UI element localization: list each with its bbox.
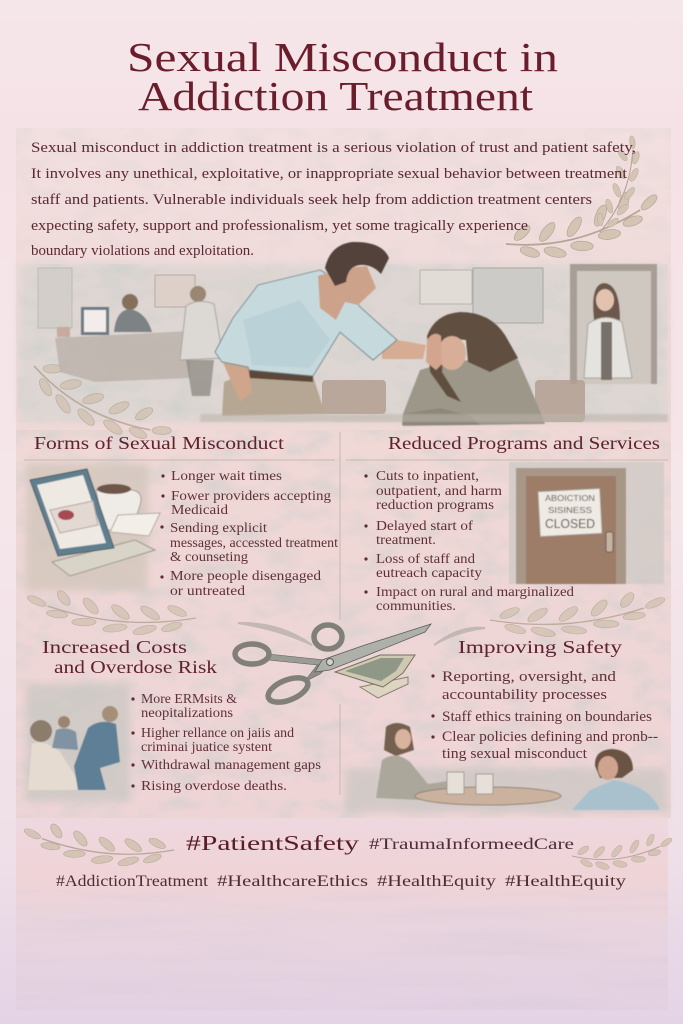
lower handle [304, 660, 335, 682]
bullet list: Cuts to inpatient, [376, 469, 479, 484]
footer wash [16, 818, 668, 1010]
heading: and Overdose Risk [54, 657, 217, 677]
bullet list: communities. [376, 599, 456, 614]
clinic wall background [18, 264, 668, 422]
illustration: tablet and coffee [26, 463, 160, 591]
panel: increased costs and overdose risk [26, 637, 321, 802]
panel: reduced programs and services [364, 433, 664, 614]
hashtags row two: #HealthEquity [505, 873, 626, 890]
panel: forms of sexual misconduct [26, 433, 338, 599]
bullet list: or untreated [170, 584, 245, 599]
bullet list: neopitalizations [141, 706, 233, 721]
swoosh behind scissors [238, 623, 485, 645]
bullet list: More ERMsits & [141, 692, 237, 707]
bullet list: & counseting [170, 550, 248, 565]
hashtags row two: #HealthcareEthics [217, 873, 368, 890]
bullet list [364, 469, 574, 614]
illustration: two people at a table [345, 723, 667, 812]
heading: Forms of Sexual Misconduct [34, 433, 284, 453]
title: Addiction Treatment [138, 73, 534, 119]
heading [42, 637, 217, 677]
illustration: ER scene [26, 684, 130, 802]
table edge [200, 414, 668, 422]
bullet list: messages, accessted treatment [170, 536, 338, 551]
closed sign: CLOSED [545, 517, 595, 531]
bullet list: eutreach capacity [376, 566, 482, 581]
hero illustration: clinic scene [18, 242, 668, 471]
bullet list: accountability processes [442, 687, 607, 703]
bullet list [131, 692, 321, 794]
title [127, 34, 558, 119]
title: Sexual Misconduct in [127, 34, 558, 80]
closed sign: SISINESS [548, 505, 592, 515]
man in blue shirt [215, 242, 426, 416]
intro paragraph: boundary violations and exploitation. [31, 243, 254, 259]
intro paragraph: expecting safety, support and professionalism, yet some tragically experience [31, 218, 528, 234]
closed sign [538, 488, 602, 537]
bullet list: Higher rellance on jaiis and [141, 726, 294, 741]
seated woman [402, 312, 545, 426]
bullet list: Staff ethics training on boundaries [442, 709, 652, 725]
leaf decoration between rows [25, 589, 667, 639]
left ring [235, 644, 269, 664]
heading: Reduced Programs and Services [388, 433, 660, 453]
bullet list: Delayed start of [376, 519, 473, 534]
right sprig [572, 833, 673, 871]
bullet list [431, 669, 658, 762]
bullet list: Longer wait times [171, 469, 282, 484]
doorway with woman on phone [570, 264, 657, 384]
bullet list: ting sexual misconduct [442, 746, 587, 762]
icon: scissors cutting money [235, 623, 485, 707]
reception desk with staff [55, 286, 223, 396]
section dividers [24, 432, 668, 795]
intro paragraph: Sexual misconduct in addiction treatment is a serious violation of trust and patient safety, [31, 140, 636, 156]
hashtags row two [56, 873, 626, 890]
left sprig [22, 823, 174, 868]
panel: improving safety [345, 637, 667, 812]
bullet list: Clear policies defining and pronb-- [442, 729, 658, 745]
left handle bar [268, 654, 328, 666]
hashtags row one [22, 823, 673, 871]
upper ring [314, 625, 342, 649]
illustration: closed door [509, 462, 664, 584]
bullet list: More people disengaged [170, 569, 321, 584]
bullet list: Impact on rural and marginalized [376, 585, 574, 600]
blade [315, 624, 431, 672]
hashtags row two: #AddictionTreatment [56, 873, 209, 890]
closed sign: ABOICTION [545, 493, 595, 503]
chairs [322, 380, 585, 422]
intro paragraph: It involves any unethical, exploitative, or inappropriate sexual behavior between treatment [31, 166, 628, 182]
intro paragraph: staff and patients. Vulnerable individuals seek help from addiction treatment centers [31, 192, 592, 208]
bullet list: treatment. [376, 533, 436, 548]
bullet list: Loss of staff and [376, 552, 475, 567]
intro leaf decoration [501, 132, 666, 267]
bullet list: Fower providers accepting [171, 489, 331, 504]
bullet list [160, 469, 338, 599]
bullet list: reduction programs [376, 498, 494, 513]
bullet list: criminai juatice systent [141, 740, 272, 755]
lower ring [265, 673, 311, 707]
pivot [326, 658, 334, 666]
left sprig [21, 338, 178, 471]
bullet list: Reporting, oversight, and [442, 669, 617, 685]
bullet list: Sending explicit [170, 521, 267, 536]
main panel background [16, 128, 671, 818]
heading: Improving Safety [458, 637, 622, 657]
dollar bills [335, 655, 415, 698]
hashtags row one: #PatientSafety [186, 831, 360, 855]
bullet list: Rising overdose deaths. [141, 779, 287, 794]
hashtags row two: #HealthEquity [377, 873, 496, 890]
intro paragraph [31, 140, 636, 259]
hashtags row one: #TraumaInformeedCare [369, 836, 574, 853]
bullet list: Medicaid [171, 503, 228, 518]
bullet list: outpatient, and harm [376, 484, 502, 499]
bullet list: Withdrawal management gaps [141, 758, 321, 773]
heading: Increased Costs [42, 637, 187, 657]
